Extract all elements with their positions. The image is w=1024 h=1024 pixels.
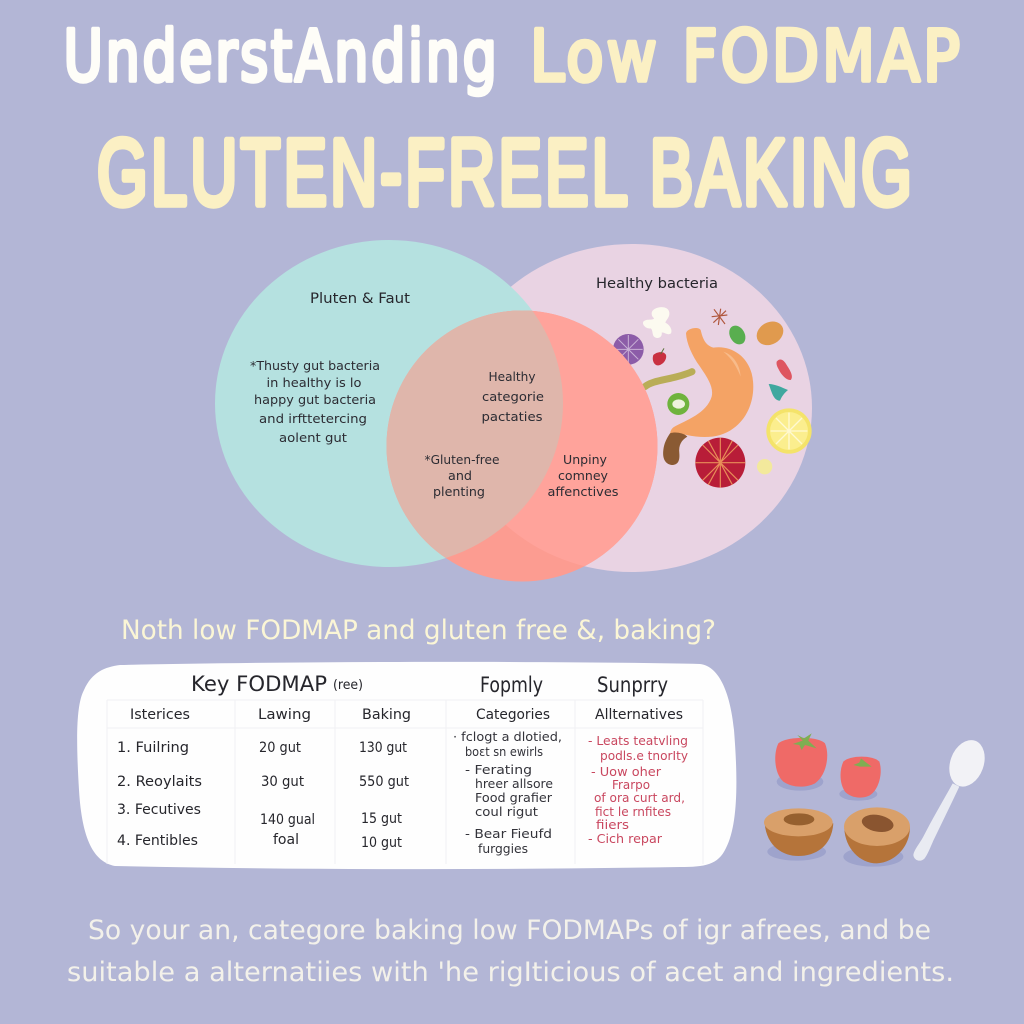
text: centre top: Healthy — [488, 369, 536, 384]
text: centre right — [548, 452, 618, 499]
column: categories — [453, 730, 562, 856]
column: lawing values: 140 gual — [260, 812, 315, 828]
label: Healthy bacteria: Healthy bacteria — [596, 276, 718, 292]
text: left circle body: *Thusty gut bacteria — [250, 358, 380, 373]
title line 1 — [64, 16, 963, 98]
column: categories: hreer allsore — [475, 777, 553, 791]
table column headers: Allternatives — [595, 707, 683, 723]
circle: centre coral — [386, 310, 658, 582]
footer text: suitable a alternatiies with 'he rigIticious of acet and ingredients. — [67, 957, 954, 988]
column: names: 2. Reoylaits — [117, 774, 202, 790]
illustration: baking items — [764, 733, 991, 867]
text: left circle body: and irfttetercing — [259, 411, 367, 426]
title — [64, 16, 963, 224]
column: alternatives: - Leats teatvling — [588, 734, 688, 748]
footer text: So your an, categore baking low FODMAPs of igr afrees, and be — [88, 915, 931, 946]
overlap: centre and right — [483, 310, 658, 566]
title line 1: Low FODMAP — [530, 16, 963, 98]
table column headers: Categories — [476, 707, 550, 723]
icon: orange nut — [752, 317, 788, 350]
column: baking values — [359, 740, 409, 851]
circle: left teal — [215, 240, 563, 567]
food illustrations — [613, 307, 812, 488]
text: centre left: plenting — [433, 484, 485, 499]
label: Pluten & Faut: Pluten & Faut — [310, 291, 410, 307]
column: alternatives: - Cich repar — [588, 832, 662, 846]
text: centre left — [424, 452, 500, 499]
column: categories: coul rigut — [475, 805, 538, 819]
text: centre top — [482, 369, 544, 424]
column: names — [117, 740, 202, 849]
icon: large tomato — [775, 733, 827, 787]
column: alternatives — [588, 734, 688, 846]
icon: small lemon — [757, 459, 772, 474]
icon: kiwi — [667, 393, 689, 415]
text: centre left: *Gluten-free — [424, 452, 500, 467]
text: centre right: comney — [558, 468, 609, 483]
table column headers: Lawing — [258, 707, 311, 723]
column: alternatives: of ora curt ard, — [594, 791, 685, 805]
column: baking values: 15 gut — [361, 811, 402, 827]
column: alternatives: Frarpo — [612, 778, 650, 792]
column: lawing values: foal — [273, 832, 299, 848]
icon: green pepper — [726, 323, 749, 347]
overlap: centre and left — [386, 310, 563, 558]
column: alternatives: podls.e tnorIty — [600, 749, 688, 763]
venn diagram — [215, 240, 812, 582]
column: categories: boɛt sn ewirls — [465, 745, 543, 759]
circle: right pink — [452, 244, 812, 572]
icon: left bread bowl — [764, 808, 833, 856]
text: left circle body: happy gut bacteria — [254, 392, 376, 407]
text: left circle body: in healthy is lo — [266, 375, 362, 390]
table grid — [107, 700, 703, 864]
icon: strawberry — [653, 348, 666, 365]
table top headings: (ree) — [333, 678, 363, 693]
icon: small tomato — [841, 757, 881, 798]
column: alternatives: fiiers — [596, 818, 629, 832]
column: baking values: 10 gut — [361, 835, 402, 851]
icon: purple citrus — [613, 334, 644, 365]
column: lawing values: 20 gut — [259, 740, 301, 756]
icon: spoon — [913, 735, 991, 861]
column: categories: - Ferating — [465, 763, 532, 777]
panel background — [77, 662, 736, 869]
table column headers — [130, 707, 683, 723]
column: alternatives: - Uow oher — [591, 765, 661, 779]
column: alternatives: fict le rnfites — [595, 805, 671, 819]
table column headers: Isterices — [130, 707, 190, 723]
column: lawing values: 30 gut — [261, 774, 304, 790]
icon: teal leaf — [769, 384, 788, 401]
text: centre top: pactaties — [482, 409, 542, 424]
subheading: Noth low FODMAP and gluten free &, baking? — [121, 615, 716, 646]
icon: red grapefruit — [695, 438, 745, 488]
icon: lemon — [766, 408, 812, 454]
column: categories: Food grafier — [475, 791, 552, 805]
text: left circle body — [250, 358, 380, 445]
text: centre top: categorie — [482, 389, 544, 404]
column: baking values: 130 gut — [359, 740, 407, 756]
icon: red chili — [777, 359, 792, 380]
icon: yellow tube — [645, 372, 692, 387]
column: names: 1. Fuilring — [117, 740, 189, 756]
text: centre left: and — [448, 468, 472, 483]
text: centre right: affenctives — [548, 484, 618, 499]
icon: right bread bowl — [844, 807, 910, 863]
column: categories: - Bear Fieufd — [465, 827, 552, 841]
table top headings — [191, 672, 668, 697]
column: baking values: 550 gut — [359, 774, 409, 790]
shadows — [767, 773, 903, 867]
panel: table — [77, 662, 736, 869]
table column headers: Baking — [362, 707, 411, 723]
column: categories: · fclogt a dlotied, — [453, 730, 562, 744]
text: centre right: Unpiny — [563, 452, 608, 467]
table top headings: Fopmly — [480, 673, 543, 697]
table top headings: Sunprry — [597, 673, 668, 697]
icon: stomach lower tract — [663, 433, 687, 465]
column: names: 4. Fentibles — [117, 833, 198, 849]
column: categories: furggies — [478, 842, 528, 856]
text: left circle body: aolent gut — [279, 430, 347, 445]
table top headings: Key FODMAP — [191, 672, 327, 696]
icon: gingerbread — [643, 307, 671, 338]
title line 1: UnderstAnding — [64, 16, 500, 98]
column: names: 3. Fecutives — [117, 802, 201, 818]
column: lawing values — [259, 740, 315, 848]
footer text — [67, 915, 954, 988]
icon: stomach — [663, 328, 753, 465]
icon: star spice — [712, 309, 727, 325]
